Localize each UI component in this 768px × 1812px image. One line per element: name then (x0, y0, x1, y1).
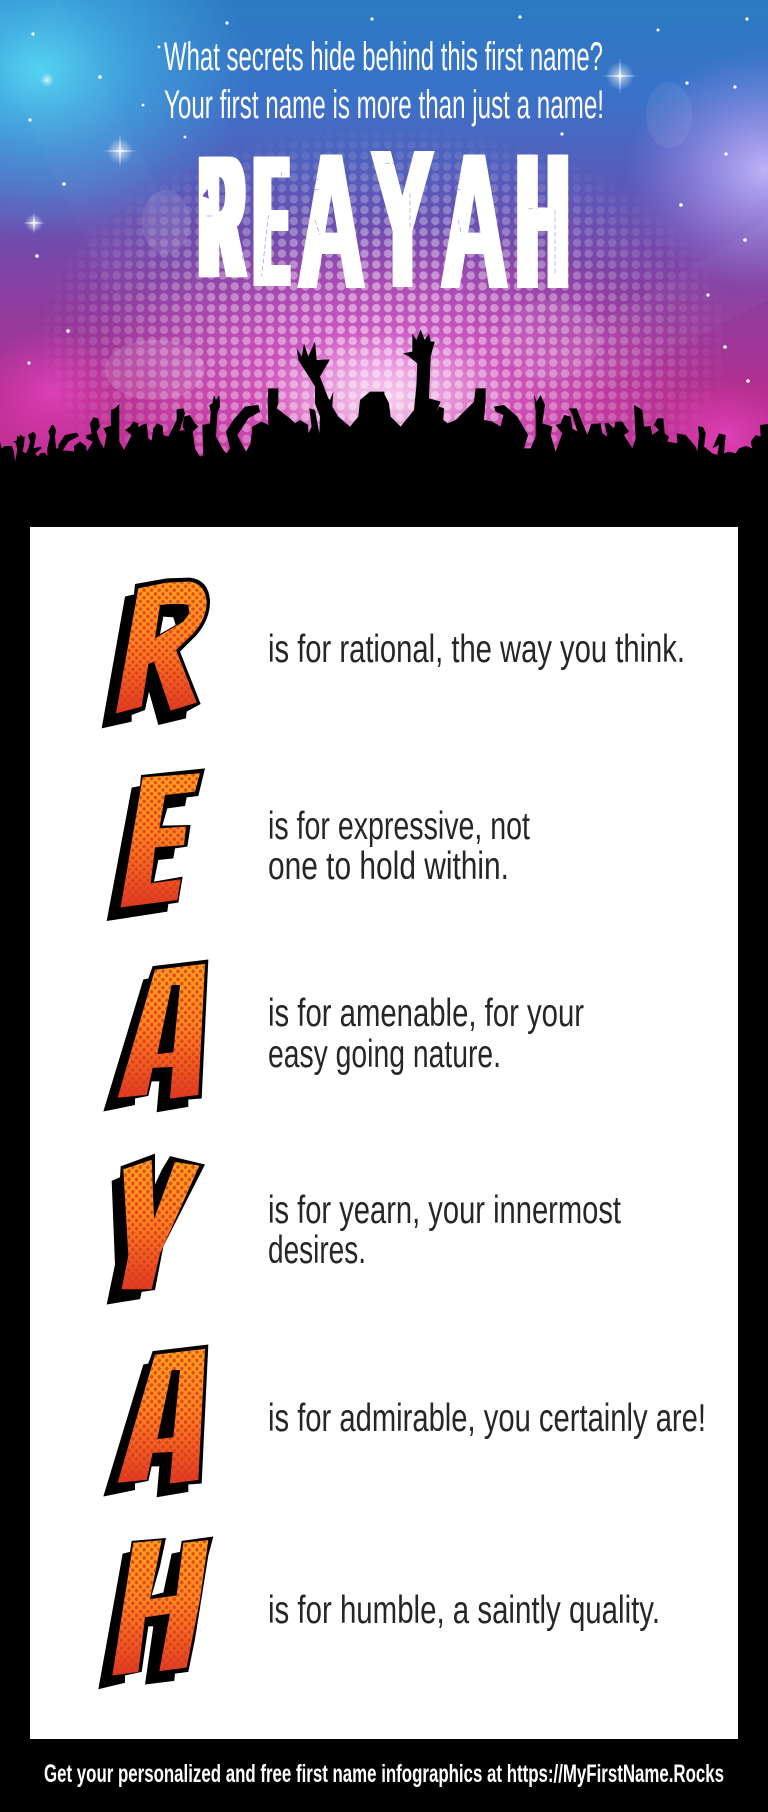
text: E meaning (268, 805, 530, 888)
text: E meaning: one to hold within. (268, 845, 509, 888)
name title REAYAH: E (256, 117, 286, 327)
name title REAYAH: H (518, 114, 567, 330)
text: E meaning: is for expressive, not (268, 805, 530, 848)
stars (23, 15, 750, 383)
name title REAYAH: R (201, 120, 243, 315)
name title REAYAH (198, 109, 568, 330)
distressed wear marks on title (202, 154, 556, 277)
text: Y meaning: desires. (268, 1229, 366, 1272)
text: A meaning (268, 992, 584, 1076)
comic letter Y (107, 1154, 205, 1305)
comic letter A (103, 1345, 208, 1497)
text: A meaning: is for amenable, for your (268, 992, 584, 1035)
crowd: right half (384, 329, 768, 530)
text: Y meaning (268, 1189, 621, 1272)
name title REAYAH: A (441, 114, 507, 330)
comic letter A (103, 960, 208, 1112)
comic letter E (107, 768, 205, 921)
comic letter R (102, 578, 210, 728)
headline text (164, 35, 604, 127)
white panel (30, 527, 738, 1739)
crowd: left half (0, 342, 384, 530)
text: A meaning: easy going nature. (268, 1033, 501, 1076)
comic letter H (98, 1537, 213, 1689)
crowd silhouette (0, 329, 768, 530)
name title REAYAH: A (298, 114, 364, 330)
name title REAYAH: Y (372, 109, 432, 330)
concert background (0, 0, 768, 462)
text: Y meaning: is for yearn, your innermost (268, 1189, 621, 1232)
